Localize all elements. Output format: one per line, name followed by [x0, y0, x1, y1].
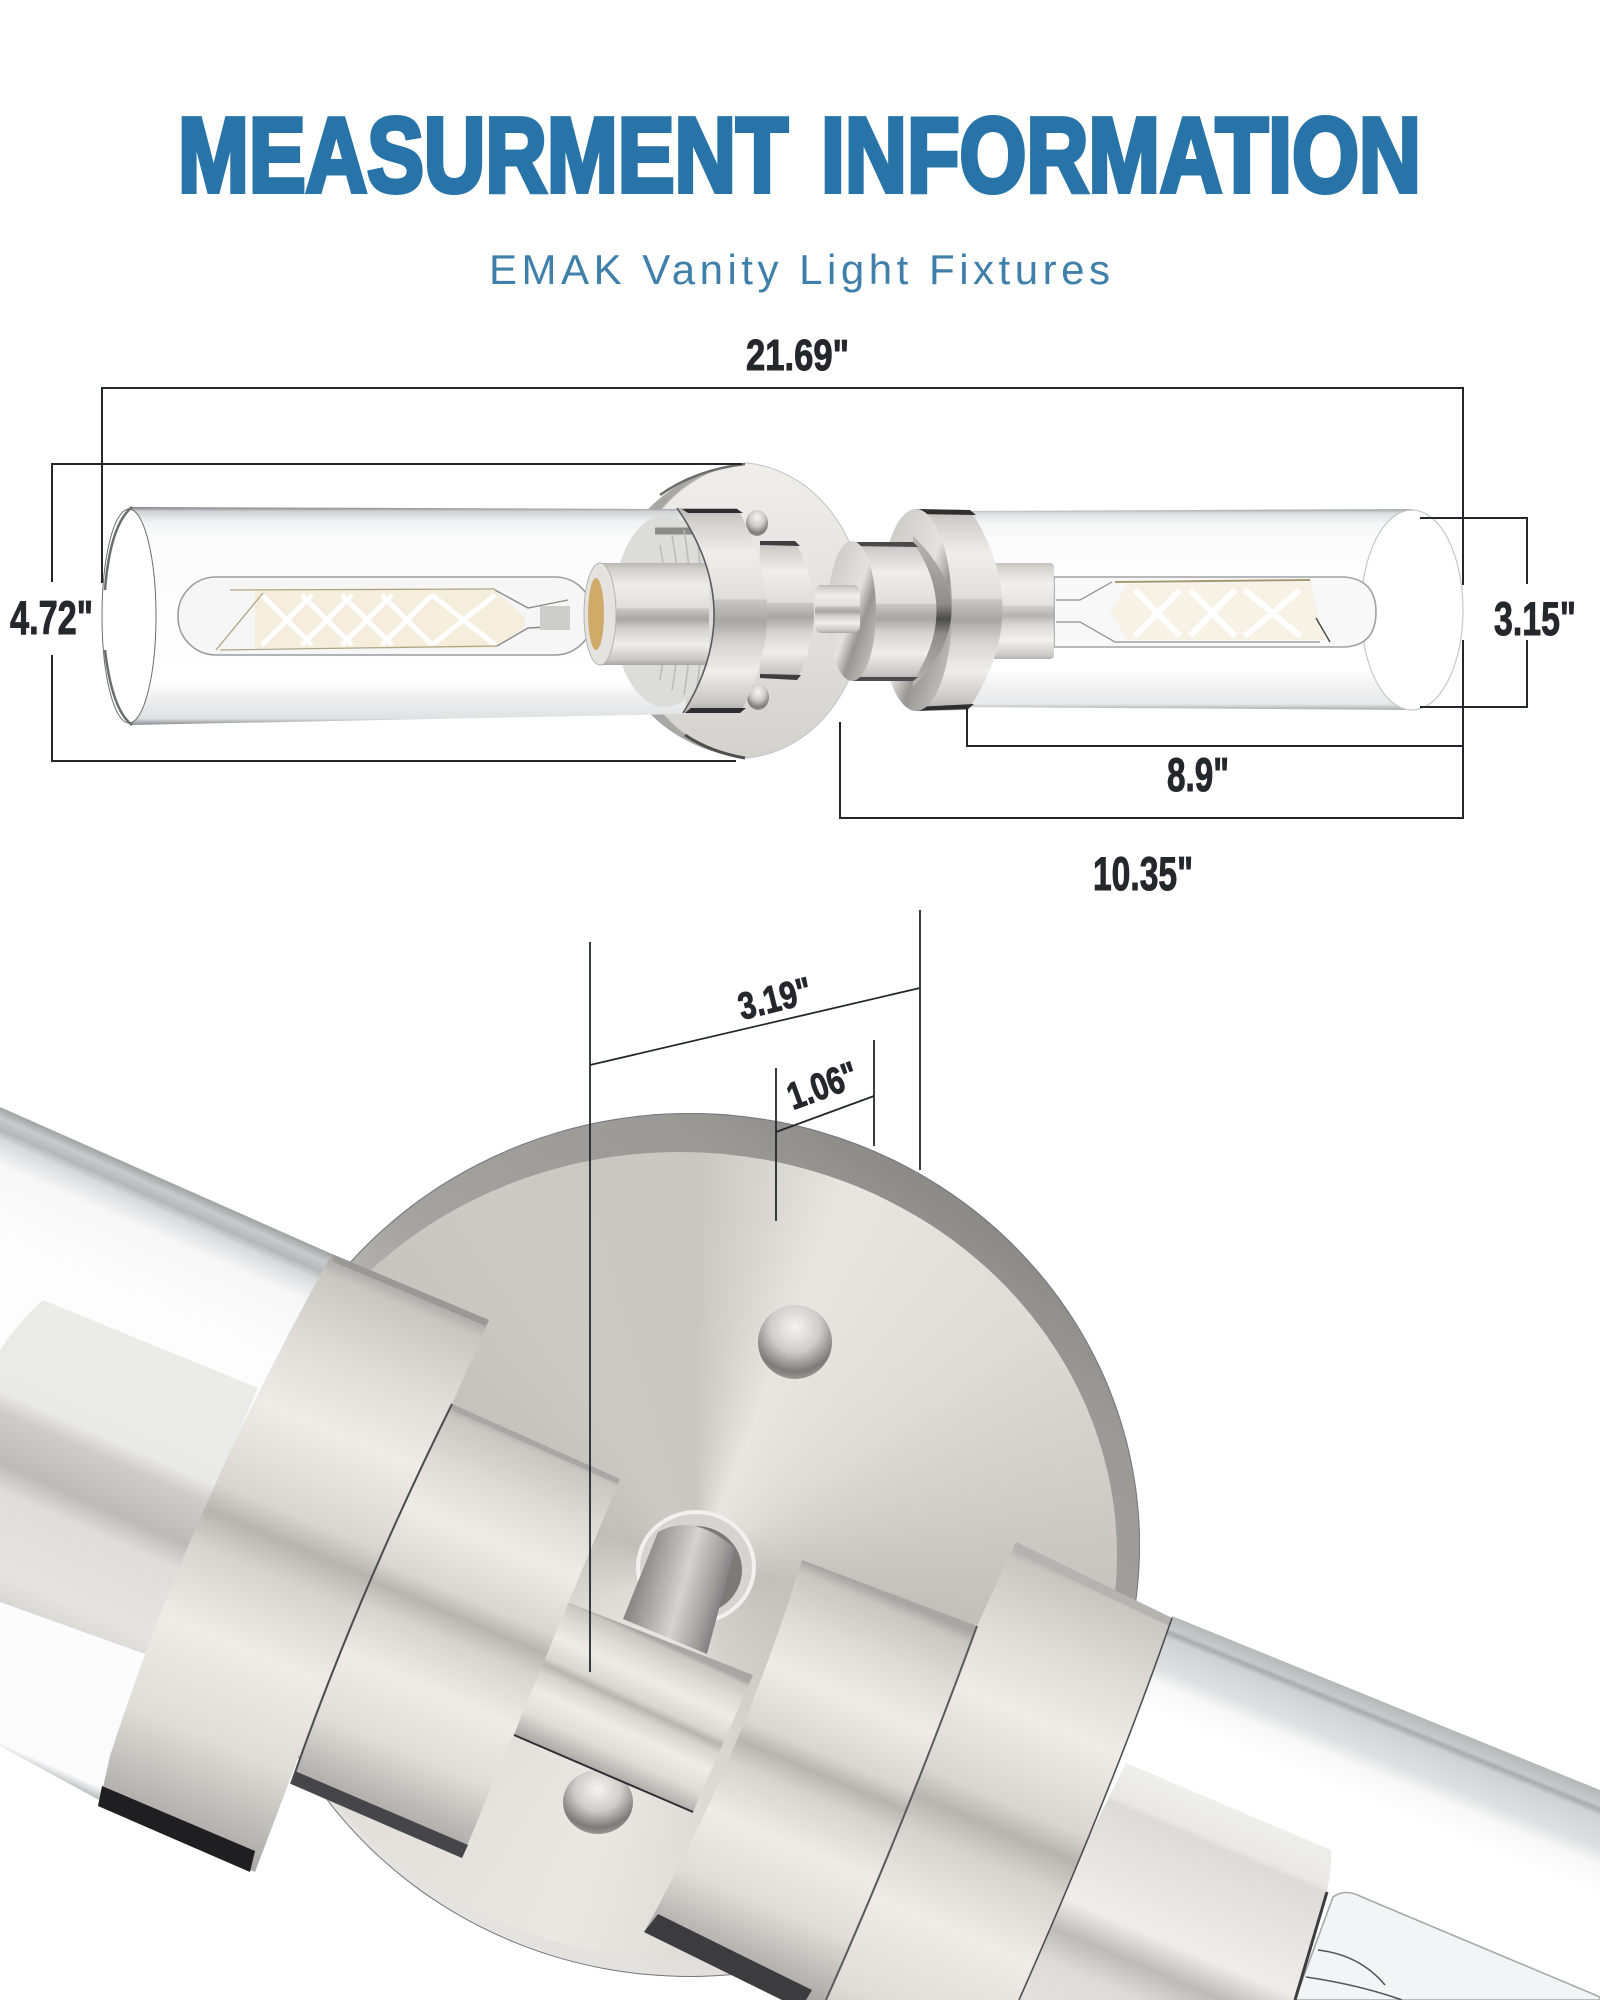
dimension label: 3.19: 3.19"	[734, 970, 816, 1029]
center stem	[815, 585, 860, 633]
dimension label: 1.06: 1.06"	[782, 1054, 864, 1118]
right collar	[880, 509, 1003, 711]
closeup right medium collar	[644, 1560, 977, 2000]
closeup backplate brushed face	[243, 1152, 1117, 1958]
closeup left glass	[0, 1107, 332, 1800]
wall backplate	[607, 463, 864, 758]
dimension label: 8.9: 8.9"	[1167, 748, 1229, 801]
dimension label: 4.72: 4.72"	[10, 591, 93, 644]
closeup right socket	[1019, 1763, 1332, 2000]
dimension lines: closeup	[590, 910, 920, 1672]
right bulb	[1054, 577, 1376, 647]
closeup right big collar	[826, 1542, 1172, 2000]
closeup left medium collar	[291, 1404, 620, 1858]
dimension label: 21.69: 21.69"	[746, 331, 849, 380]
closeup stem	[514, 1602, 753, 1812]
title: INFORMATION	[821, 96, 1421, 214]
mounting screws	[746, 510, 769, 710]
right glass shade	[968, 509, 1463, 710]
left glass shade	[102, 507, 717, 725]
closeup fixture	[0, 1107, 1600, 2000]
closeup left big collar	[98, 1254, 489, 1872]
title: MEASURMENT	[178, 96, 788, 214]
closeup screws	[563, 1305, 832, 1834]
closeup backplate rim	[240, 1113, 1140, 1977]
left bulb	[178, 577, 593, 655]
closeup hole and post	[623, 1512, 754, 1654]
title	[178, 96, 1421, 214]
dimension lines: front view	[52, 388, 1527, 818]
left socket	[584, 563, 709, 665]
subtitle: EMAK Vanity Light Fixtures	[489, 246, 1110, 293]
right stepped cylinder	[828, 541, 936, 681]
front view fixture	[102, 463, 1463, 758]
closeup right bulb	[1295, 1892, 1600, 2000]
dimension label: 10.35: 10.35"	[1093, 847, 1193, 900]
right socket	[990, 563, 1054, 659]
left collar	[677, 508, 860, 713]
closeup right glass	[1019, 1616, 1600, 2000]
closeup left socket	[0, 1300, 258, 1654]
